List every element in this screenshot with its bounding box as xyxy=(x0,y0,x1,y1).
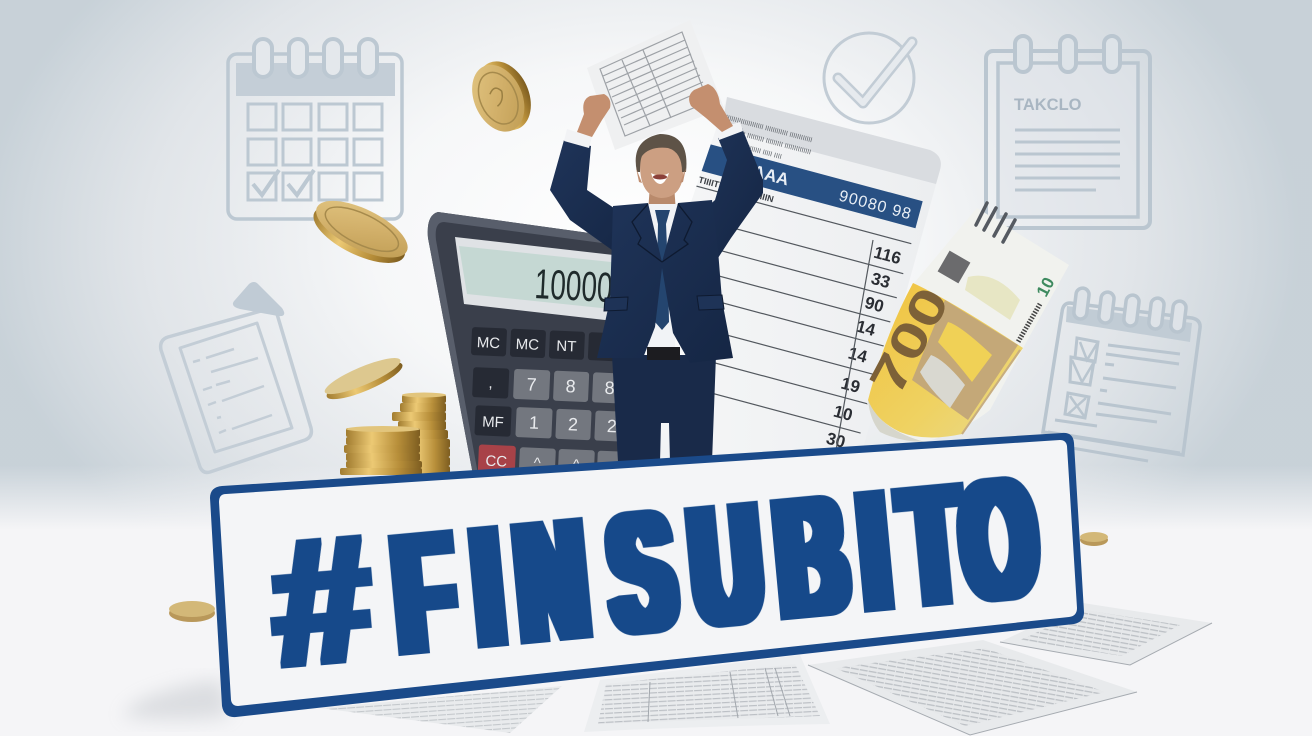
banner: #FINSUBITO xyxy=(210,433,1084,717)
keypad: 7 xyxy=(526,374,537,395)
headline: # xyxy=(264,497,379,704)
keypad: , xyxy=(488,375,493,392)
header lines: IIIIIIIIIIIIIIIIIIII IIIIIIIIIIII IIIIIIIIIIII xyxy=(725,114,813,144)
header lines: IIIIII IIIII IIIIIIIII IIIIIIIII IIIIIIIIIIIIII xyxy=(722,126,812,156)
banner shadow xyxy=(120,680,230,720)
blue band xyxy=(702,144,923,228)
blue band: 90080 98 xyxy=(837,188,914,223)
paper: under banner left xyxy=(320,686,562,733)
neck and face xyxy=(636,134,686,212)
paper: under banner centre xyxy=(584,655,830,732)
coin: middle floating xyxy=(306,189,416,274)
coin: floor left xyxy=(169,601,215,622)
keypad xyxy=(466,327,637,482)
keypad: 8 xyxy=(604,378,615,398)
keypad: 8 xyxy=(565,376,576,397)
keypad: ^ xyxy=(572,456,580,474)
amounts xyxy=(826,247,901,447)
keypad: MC xyxy=(515,336,540,354)
bill / statement: AAAIIIIIIIII xyxy=(645,331,688,352)
icon: notepad with TAKCLO xyxy=(986,36,1150,228)
tie xyxy=(655,210,670,330)
coin: lower floating xyxy=(321,352,406,406)
keypad: 2 xyxy=(568,414,578,435)
blue band: MAAA xyxy=(737,158,791,189)
header lines: II IIIII IIII IIIIIIII IIIII IIII xyxy=(718,138,782,161)
trousers xyxy=(612,355,716,462)
bridge engraving xyxy=(912,300,1018,420)
keypad: 2 xyxy=(606,416,617,436)
coin: floor right xyxy=(1080,532,1108,546)
bill / statement xyxy=(692,97,941,448)
paper: held overhead xyxy=(587,20,724,150)
icon: check circle xyxy=(824,33,914,123)
keypad: ^ xyxy=(533,455,541,472)
keypad: CC xyxy=(485,453,508,471)
keypad: MF xyxy=(482,414,504,431)
amounts: 30 xyxy=(824,429,847,452)
header lines xyxy=(720,114,812,159)
cuffs xyxy=(564,122,743,148)
left sleeve xyxy=(550,140,640,250)
jacket xyxy=(597,200,733,363)
keypad: MC xyxy=(476,334,501,352)
man in navy suit xyxy=(550,84,763,462)
hands xyxy=(577,94,610,137)
headline: FINSUBITO xyxy=(387,442,1044,688)
paper: far right xyxy=(1000,603,1212,665)
table rows xyxy=(696,186,912,434)
bill / statement: AIIII xyxy=(660,274,679,288)
bill / statement: AAAIII xyxy=(638,358,667,374)
keypad: M xyxy=(599,340,612,357)
amounts: 10 xyxy=(831,402,855,425)
paper: under banner right xyxy=(808,640,1137,735)
label: 700: 700 xyxy=(859,278,960,403)
display: 10000 xyxy=(534,260,614,311)
bill / statement: BIDIIIOAA xyxy=(674,224,718,245)
belt xyxy=(647,347,680,360)
icon: tilted clipboard xyxy=(161,282,311,472)
right sleeve xyxy=(688,128,763,258)
amounts: 19 xyxy=(839,374,862,397)
euro banknote xyxy=(859,203,1069,442)
keypad: NT xyxy=(556,338,577,356)
calculator xyxy=(428,212,640,482)
icon: calendar with checks xyxy=(228,39,402,219)
display xyxy=(455,237,640,324)
bill / statement: BICIIIOUM xyxy=(680,199,726,220)
amounts: 33 xyxy=(869,269,892,292)
keypad: 1 xyxy=(529,413,539,433)
coin stacks xyxy=(340,392,450,475)
label: TAKCLO: TAKCLO xyxy=(1014,96,1082,114)
amounts: 116 xyxy=(872,243,903,268)
label: 10: 10 xyxy=(1033,274,1058,300)
bill / statement: AAIIIAA IT0 xyxy=(668,247,717,270)
shirt xyxy=(646,204,677,350)
amounts: 90 xyxy=(863,293,886,316)
amounts: 14 xyxy=(846,343,870,367)
coin: top floating xyxy=(462,53,541,141)
bill / statement: III TIIIITUUIIITIEITIIIN xyxy=(688,172,775,204)
icon: tilted checklist xyxy=(1043,287,1200,461)
amounts: 14 xyxy=(854,317,878,340)
